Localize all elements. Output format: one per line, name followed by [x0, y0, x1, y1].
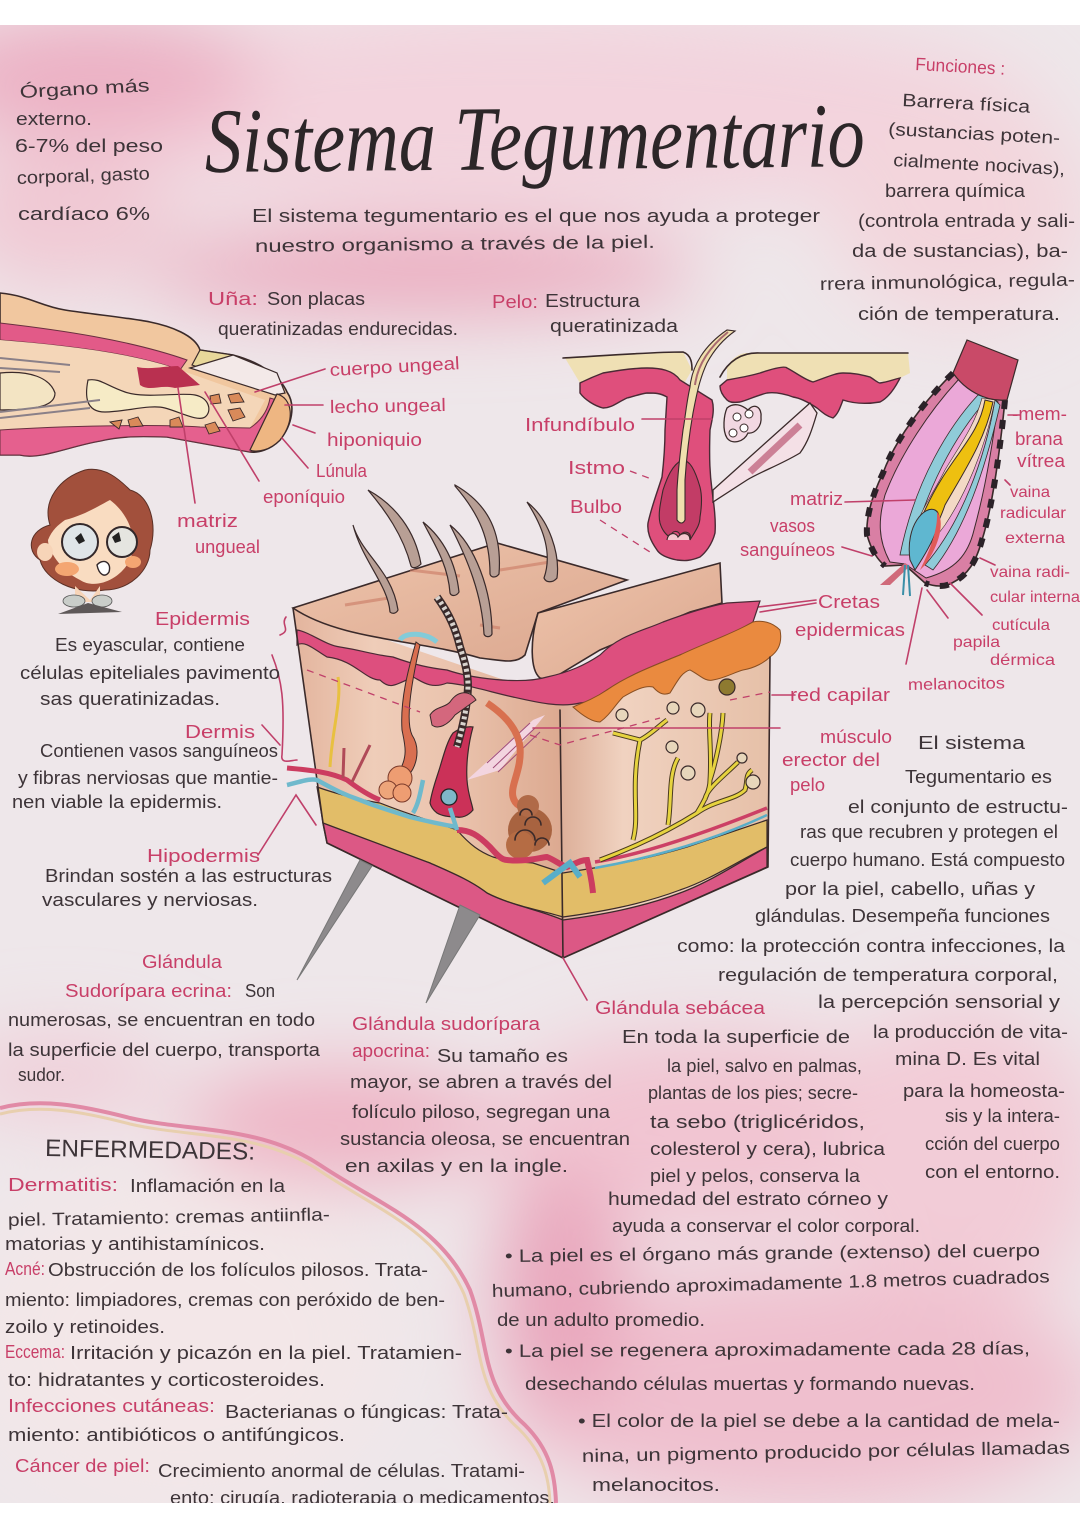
text: integumentary system paragraph: por la piel, cabello, uñas y — [785, 879, 1035, 899]
left face of skin block — [294, 610, 562, 919]
bullet list: skin facts: • El color de la piel se debe a la cantidad de mela- — [578, 1411, 1060, 1431]
skin block labels: epidermicas — [795, 620, 905, 640]
follicle labels — [525, 415, 635, 517]
eccrine gland and duct — [400, 634, 437, 642]
intro sentence: El sistema tegumentario es el que nos ayuda a proteger — [252, 206, 820, 226]
skin block labels: erector del — [782, 750, 880, 770]
text: integumentary system paragraph: cción del cuerpo — [925, 1134, 1060, 1154]
text: functions: Barrera física — [902, 90, 1032, 117]
disease: skin infections: miento: antibióticos o antifúngicos. — [8, 1425, 345, 1445]
text: dermis: nen viable la epidermis. — [12, 792, 222, 812]
text: integumentary system paragraph: ras que recubren y protegen el — [800, 822, 1058, 842]
bullet list: skin facts: desechando células muertas y formando nuevas. — [525, 1374, 975, 1394]
root labels: matriz — [790, 489, 843, 509]
pink brackets for skin layers — [258, 617, 316, 855]
bullet list: skin facts: melanocitos. — [592, 1475, 720, 1495]
text: eccrine sweat gland: numerosas, se encuentran en todo — [8, 1010, 315, 1030]
root labels: vaina — [1010, 484, 1050, 501]
text: eccrine sweat gland: la superficie del cuerpo, transporta — [8, 1040, 321, 1060]
bullet list: skin facts: de un adulto promedio. — [497, 1310, 705, 1330]
disease: dermatitis: Inflamación en la — [130, 1176, 286, 1196]
heading: diseases: ENFERMEDADES: — [45, 1135, 255, 1166]
muscle and pale band — [467, 715, 545, 780]
text: hair definition: Pelo: — [492, 292, 538, 312]
text: hypodermis: vasculares y nerviosas. — [42, 890, 258, 910]
text: organ facts — [15, 74, 163, 224]
text: sebaceous gland: plantas de los pies; secre- — [648, 1083, 858, 1103]
follicle labels: Istmo — [568, 458, 625, 478]
nail labels: ungueal — [195, 537, 260, 557]
intro sentence — [252, 206, 820, 256]
root labels: papila — [953, 634, 1000, 651]
text: integumentary system paragraph: con el entorno. — [925, 1162, 1060, 1182]
root labels: vasos — [770, 516, 815, 536]
wavy divider around diseases panel — [0, 1103, 556, 1503]
disease: skin infections: Bacterianas o fúngicas: Trata- — [225, 1402, 508, 1422]
text: eccrine sweat gland — [8, 952, 321, 1085]
text: hair definition: Estructura — [545, 291, 641, 311]
text: functions: (controla entrada y sali- — [858, 211, 1075, 231]
text: organ facts: externo. — [16, 109, 92, 129]
panel: diseases — [5, 1135, 555, 1508]
text: eccrine sweat gland: Glándula — [142, 952, 223, 972]
text: sebaceous gland: En toda la superficie de — [622, 1027, 850, 1047]
text: nail definition: Son placas — [267, 289, 365, 309]
follicle labels: Bulbo — [570, 497, 622, 517]
text: apocrine sweat gland: Glándula sudorípara — [352, 1014, 541, 1034]
bullet list: skin facts — [492, 1240, 1070, 1495]
disease: acne: Acné: — [5, 1259, 45, 1279]
bullet list: skin facts: nina, un pigmento producido por células llamadas — [582, 1437, 1070, 1466]
text: integumentary system paragraph: la producción de vita- — [873, 1022, 1068, 1042]
skin block labels: red capilar — [790, 685, 890, 705]
text: apocrine sweat gland: apocrina: — [352, 1041, 430, 1061]
illustration: hair follicle cross-section — [563, 330, 910, 561]
skin block labels: músculo — [820, 727, 892, 747]
top surface of skin block — [293, 543, 627, 661]
disease: skin infections: Infecciones cutáneas: — [8, 1396, 215, 1416]
root labels: dérmica — [990, 652, 1055, 669]
text: apocrine sweat gland: Su tamaño es — [437, 1046, 568, 1066]
text: functions: barrera química — [885, 181, 1026, 201]
text: sebaceous gland: ta sebo (triglicéridos, — [650, 1112, 865, 1132]
text: dermis — [12, 722, 278, 812]
text: hypodermis: Brindan sostén a las estructuras — [45, 866, 332, 886]
text: hypodermis — [42, 846, 332, 910]
orange papillary layer — [573, 621, 781, 722]
text: nail definition: queratinizadas endurecidas. — [218, 319, 458, 339]
skin block labels: Cretas — [818, 592, 880, 612]
text: organ facts: cardíaco 6% — [18, 204, 150, 224]
follicle callouts — [600, 419, 712, 552]
nail labels: hiponiquio — [327, 430, 422, 450]
text: sebaceous gland: ayuda a conservar el color corporal. — [612, 1216, 920, 1236]
illustration: enlarged hair root — [867, 340, 1018, 596]
nail labels: matriz — [177, 511, 238, 531]
disease: acne: Obstrucción de los folículos pilosos. Trata- — [48, 1260, 428, 1280]
text: apocrine sweat gland: folículo piloso, segregan una — [352, 1102, 611, 1122]
text: functions: (sustancias poten- — [888, 119, 1061, 148]
disease: dermatitis: piel. Tratamiento: cremas antiinfla- — [8, 1204, 330, 1230]
root labels — [740, 404, 1080, 694]
nail labels: Lúnula — [316, 461, 368, 481]
text: epidermis: Es eyascular, contiene — [55, 635, 245, 655]
disease: dermatitis: matorias y antihistamínicos. — [5, 1234, 265, 1254]
disease: skin cancer: ento: cirugía, radioterapia o medicamentos. — [170, 1488, 555, 1508]
follicle labels: Infundíbulo — [525, 415, 635, 435]
text: apocrine sweat gland: en axilas y en la ingle. — [345, 1156, 568, 1176]
text: functions — [820, 54, 1075, 324]
text: eccrine sweat gland: Sudorípara ecrina: — [65, 981, 232, 1001]
text: organ facts: corporal, gasto — [16, 163, 150, 188]
text: organ facts: 6-7% del peso — [15, 136, 163, 156]
disease: dermatitis — [5, 1175, 330, 1254]
subcutis pink layer — [323, 823, 767, 958]
text: hair definition — [492, 291, 679, 336]
text: nail definition: Uña: — [208, 289, 258, 309]
text: dermis: Contienen vasos sanguíneos — [40, 741, 278, 761]
bullet list: skin facts: • La piel es el órgano más grande (extenso) del cuerpo — [505, 1240, 1040, 1266]
skin block labels: pelo — [790, 775, 825, 795]
text: hair definition: queratinizada — [550, 316, 679, 336]
text: integumentary system paragraph: mina D. Es vital — [895, 1049, 1040, 1069]
text: integumentary system paragraph: como: la protección contra infecciones, la — [677, 936, 1066, 956]
text: integumentary system paragraph: cuerpo humano. Está compuesto — [790, 850, 1065, 870]
disease: skin cancer — [16, 1458, 554, 1503]
disease: skin infections — [8, 1396, 508, 1445]
disease: acne — [5, 1259, 445, 1337]
hair follicle in dermis — [430, 727, 473, 817]
nail labels: lecho ungeal — [330, 395, 446, 417]
text: sebaceous gland: la piel, salvo en palmas, — [667, 1056, 862, 1076]
disease: eczema: Eccema: — [5, 1342, 65, 1362]
skin band and follicle wall — [580, 368, 715, 561]
right face of skin block — [561, 658, 770, 920]
hypodermis yellow layer — [317, 787, 767, 917]
text: integumentary system paragraph — [677, 733, 1068, 1182]
apocrine gland and duct — [487, 703, 527, 807]
text: nail definition — [208, 289, 458, 339]
text: functions: Funciones : — [915, 54, 1006, 79]
text: epidermis: Epidermis — [155, 609, 250, 629]
text: hypodermis: Hipodermis — [147, 846, 260, 866]
nerve endings — [600, 713, 752, 860]
root labels: cular interna — [990, 589, 1080, 606]
root labels: sanguíneos — [740, 540, 835, 560]
text: sebaceous gland: humedad del estrato córneo y — [608, 1189, 888, 1209]
disease: eczema — [5, 1342, 462, 1390]
text: integumentary system paragraph: la percepción sensorial y — [818, 992, 1060, 1012]
disease: dermatitis: Dermatitis: — [8, 1175, 118, 1195]
disease: eczema: Irritación y picazón en la piel. Tratamien- — [70, 1343, 462, 1363]
illustration: skin block — [287, 485, 781, 1003]
text: epidermis: sas queratinizadas. — [40, 689, 220, 709]
text: functions: cialmente nocivas), — [893, 150, 1066, 179]
icon: cartoon girl with glasses — [31, 469, 153, 614]
intro sentence: nuestro organismo a través de la piel. — [255, 232, 655, 256]
root labels: radicular — [1000, 505, 1067, 522]
sebaceous gland — [724, 405, 761, 442]
text: sebaceous gland: colesterol y cera), lubrica — [650, 1139, 886, 1159]
text: organ facts: Órgano más — [19, 74, 150, 102]
disease: eczema: to: hidratantes y corticosteroides. — [8, 1370, 325, 1390]
text: apocrine sweat gland — [340, 1014, 630, 1176]
erector muscle — [713, 403, 817, 502]
skin block labels — [782, 592, 905, 795]
root callouts — [758, 415, 1020, 695]
text: apocrine sweat gland: sustancia oleosa, se encuentran — [340, 1129, 630, 1149]
text: dermis: y fibras nerviosas que mantie- — [18, 768, 278, 788]
text: functions: ción de temperatura. — [858, 304, 1060, 324]
text: integumentary system paragraph: glándulas. Desempeña funciones — [755, 906, 1050, 926]
text: integumentary system paragraph: sis y la intera- — [945, 1106, 1060, 1126]
bullet list: skin facts: humano, cubriendo aproximadamente 1.8 metros cuadrados — [492, 1266, 1050, 1301]
hair strands — [353, 485, 558, 637]
disease: skin cancer: Cáncer de piel: — [15, 1456, 150, 1476]
root labels: -mem- — [1012, 404, 1067, 424]
nail labels: cuerpo ungeal — [329, 353, 460, 380]
nail labels — [177, 353, 460, 557]
hair shaft — [677, 330, 735, 523]
text: functions: da de sustancias), ba- — [852, 241, 1068, 261]
pencil shadows — [297, 860, 480, 1003]
nail callout lines — [178, 369, 325, 503]
bullet list: skin facts: • La piel se regenera aproximadamente cada 28 días, — [505, 1338, 1030, 1361]
text: epidermis: células epiteliales pavimento — [20, 663, 280, 683]
root labels: brana — [1015, 429, 1064, 449]
disease: acne: miento: limpiadores, cremas con peróxido de ben- — [5, 1290, 445, 1310]
nail labels: eponíquio — [263, 487, 345, 507]
text: apocrine sweat gland: mayor, se abren a través del — [350, 1072, 612, 1092]
text: integumentary system paragraph: Tegumentario es — [905, 767, 1052, 787]
root labels: vaina radi- — [990, 564, 1070, 581]
root labels: cutícula — [992, 617, 1050, 634]
root labels: melanocitos — [908, 675, 1005, 694]
text: epidermis — [20, 609, 280, 709]
text: sebaceous gland: piel y pelos, conserva la — [650, 1166, 861, 1186]
text: integumentary system paragraph: regulación de temperatura corporal, — [718, 965, 1058, 985]
text: eccrine sweat gland: sudor. — [18, 1065, 65, 1085]
text: integumentary system paragraph: para la homeosta- — [903, 1081, 1065, 1101]
illustration: fingertip and nail — [0, 293, 292, 456]
disease: acne: zoilo y retinoides. — [5, 1317, 165, 1337]
title: Sistema Tegumentario — [204, 84, 865, 192]
text: eccrine sweat gland: Son — [245, 981, 275, 1001]
root labels: externa — [1005, 530, 1065, 547]
text: functions: rrera inmunológica, regula- — [820, 270, 1075, 294]
text: sebaceous gland: Glándula sebácea — [595, 998, 766, 1018]
text: dermis: Dermis — [185, 722, 255, 742]
text: sebaceous gland — [595, 998, 920, 1236]
text: integumentary system paragraph: El sistema — [918, 733, 1026, 753]
epidermis pink band — [297, 601, 760, 705]
root labels: vítrea — [1017, 451, 1066, 471]
text: integumentary system paragraph: el conjunto de estructu- — [848, 797, 1068, 817]
blood vessels — [287, 768, 380, 800]
disease: skin cancer: Crecimiento anormal de células. Tratami- — [158, 1461, 525, 1481]
